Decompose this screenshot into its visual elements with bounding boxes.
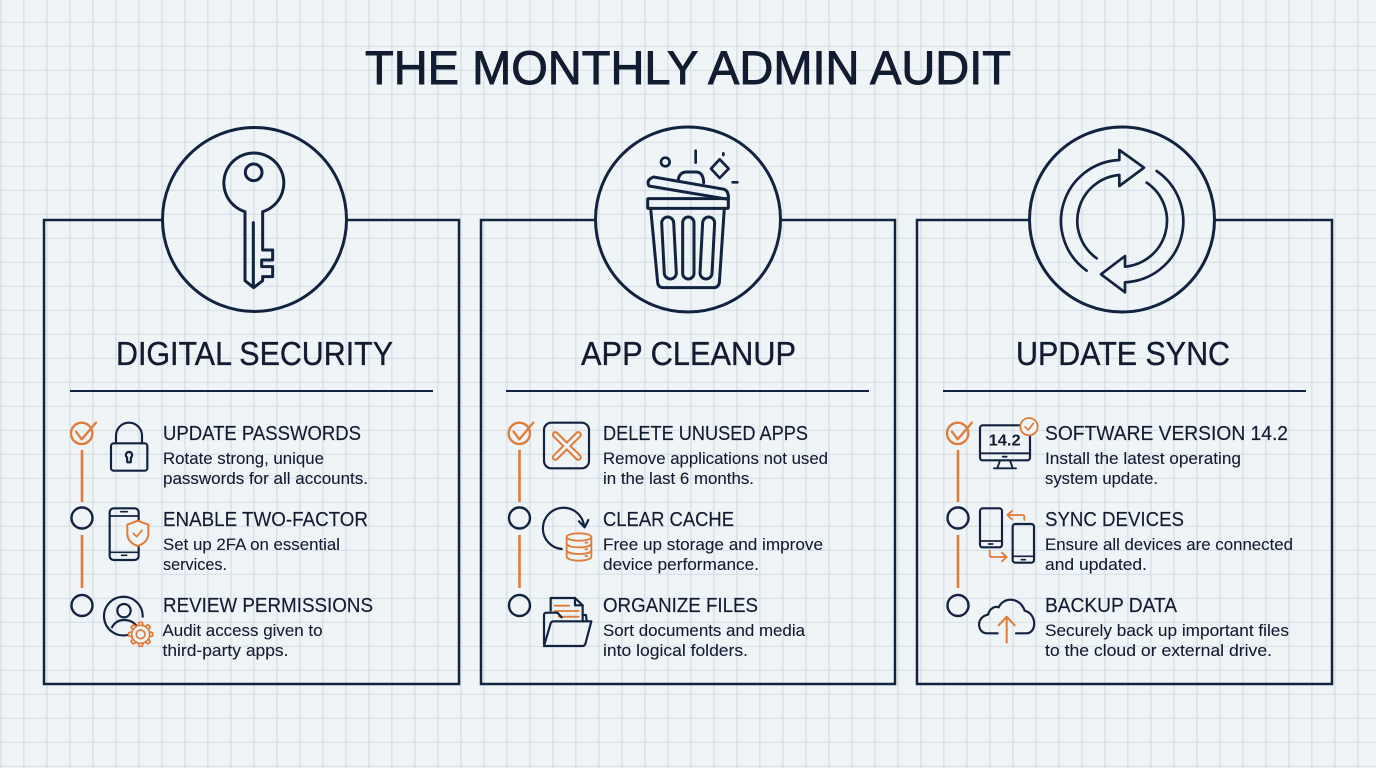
status: open [509, 508, 530, 528]
item title: ENABLE TWO-FACTOR [163, 508, 368, 531]
icon: monitor with version badge: 14.2 [989, 433, 1021, 450]
title: THE MONTHLY ADMIN AUDIT [365, 42, 1011, 95]
item description [163, 536, 340, 574]
status: checked [71, 423, 96, 444]
item description: Set up 2FA on essential [163, 536, 340, 554]
item description: device performance. [603, 556, 759, 574]
status: checked [947, 423, 972, 444]
item description: third-party apps. [162, 642, 288, 660]
item title: BACKUP DATA [1045, 594, 1177, 617]
item description: Ensure all devices are connected [1045, 536, 1293, 554]
item description: Sort documents and media [603, 622, 806, 640]
icon: refresh with database [543, 508, 591, 561]
panel frame [917, 220, 1332, 684]
status: open [948, 595, 968, 616]
item title: REVIEW PERMISSIONS [163, 594, 373, 617]
timeline connectors [957, 450, 959, 588]
item description: and updated. [1045, 556, 1147, 574]
icon: trash can in circle [596, 127, 780, 312]
item title: SYNC DEVICES [1045, 508, 1184, 531]
item description [1045, 450, 1241, 488]
item description: to the cloud or external drive. [1045, 642, 1272, 660]
item description [603, 450, 828, 488]
item title: SOFTWARE VERSION 14.2 [1045, 422, 1288, 445]
item description: system update. [1045, 470, 1158, 488]
item description: Securely back up important files [1045, 622, 1289, 640]
icon: padlock [111, 423, 147, 471]
item title: ORGANIZE FILES [603, 594, 758, 617]
panel frame [44, 220, 459, 684]
status: open [72, 508, 92, 528]
item: clear cache [509, 508, 823, 574]
icon: phone with shield [110, 508, 148, 560]
item description: Free up storage and improve [603, 536, 823, 554]
item: delete unused apps [509, 422, 828, 488]
status: open [72, 595, 92, 616]
item: organize files [509, 594, 806, 660]
icon: monitor with version badge [980, 418, 1038, 468]
icon: cloud upload [979, 600, 1034, 643]
panel: update sync [917, 127, 1332, 684]
icon: two phones with arrows [980, 508, 1034, 563]
item description [1045, 536, 1293, 574]
item description: services. [163, 556, 227, 574]
item description: Rotate strong, unique [163, 450, 324, 468]
panel heading: APP CLEANUP [581, 335, 796, 372]
item title: UPDATE PASSWORDS [163, 422, 361, 445]
icon: app tile with X [544, 423, 589, 468]
item title: CLEAR CACHE [603, 508, 734, 531]
panel frame [481, 220, 895, 684]
icon: sync arrows in circle [1030, 127, 1214, 312]
icon: folder with document [544, 598, 591, 646]
item description: in the last 6 months. [603, 470, 754, 488]
item: review permissions [72, 594, 373, 660]
item: backup data [948, 594, 1289, 660]
item description: into logical folders. [603, 642, 748, 660]
item description [1045, 622, 1289, 660]
icon: key in circle [162, 128, 346, 312]
item: enable two-factor [72, 508, 368, 574]
panel heading: DIGITAL SECURITY [116, 335, 393, 372]
status: open [948, 508, 968, 528]
item description [163, 450, 368, 488]
item: sync devices [948, 508, 1293, 574]
item title: DELETE UNUSED APPS [603, 422, 808, 445]
item description: Remove applications not used [603, 450, 828, 468]
item description: passwords for all accounts. [163, 470, 368, 488]
item: software version 14.2 [947, 418, 1288, 488]
item: update passwords [71, 422, 368, 488]
status: open [509, 595, 530, 616]
item description: Install the latest operating [1045, 450, 1241, 468]
panel: digital security [44, 128, 459, 684]
timeline connectors [81, 450, 83, 588]
item description [162, 622, 322, 660]
item description: Audit access given to [162, 622, 322, 640]
item description [603, 536, 823, 574]
panel heading: UPDATE SYNC [1016, 335, 1230, 372]
timeline connectors [518, 450, 521, 588]
status: checked [509, 423, 533, 444]
panel: app cleanup [481, 127, 895, 684]
icon: user with gear [104, 597, 153, 646]
item description [603, 622, 806, 660]
